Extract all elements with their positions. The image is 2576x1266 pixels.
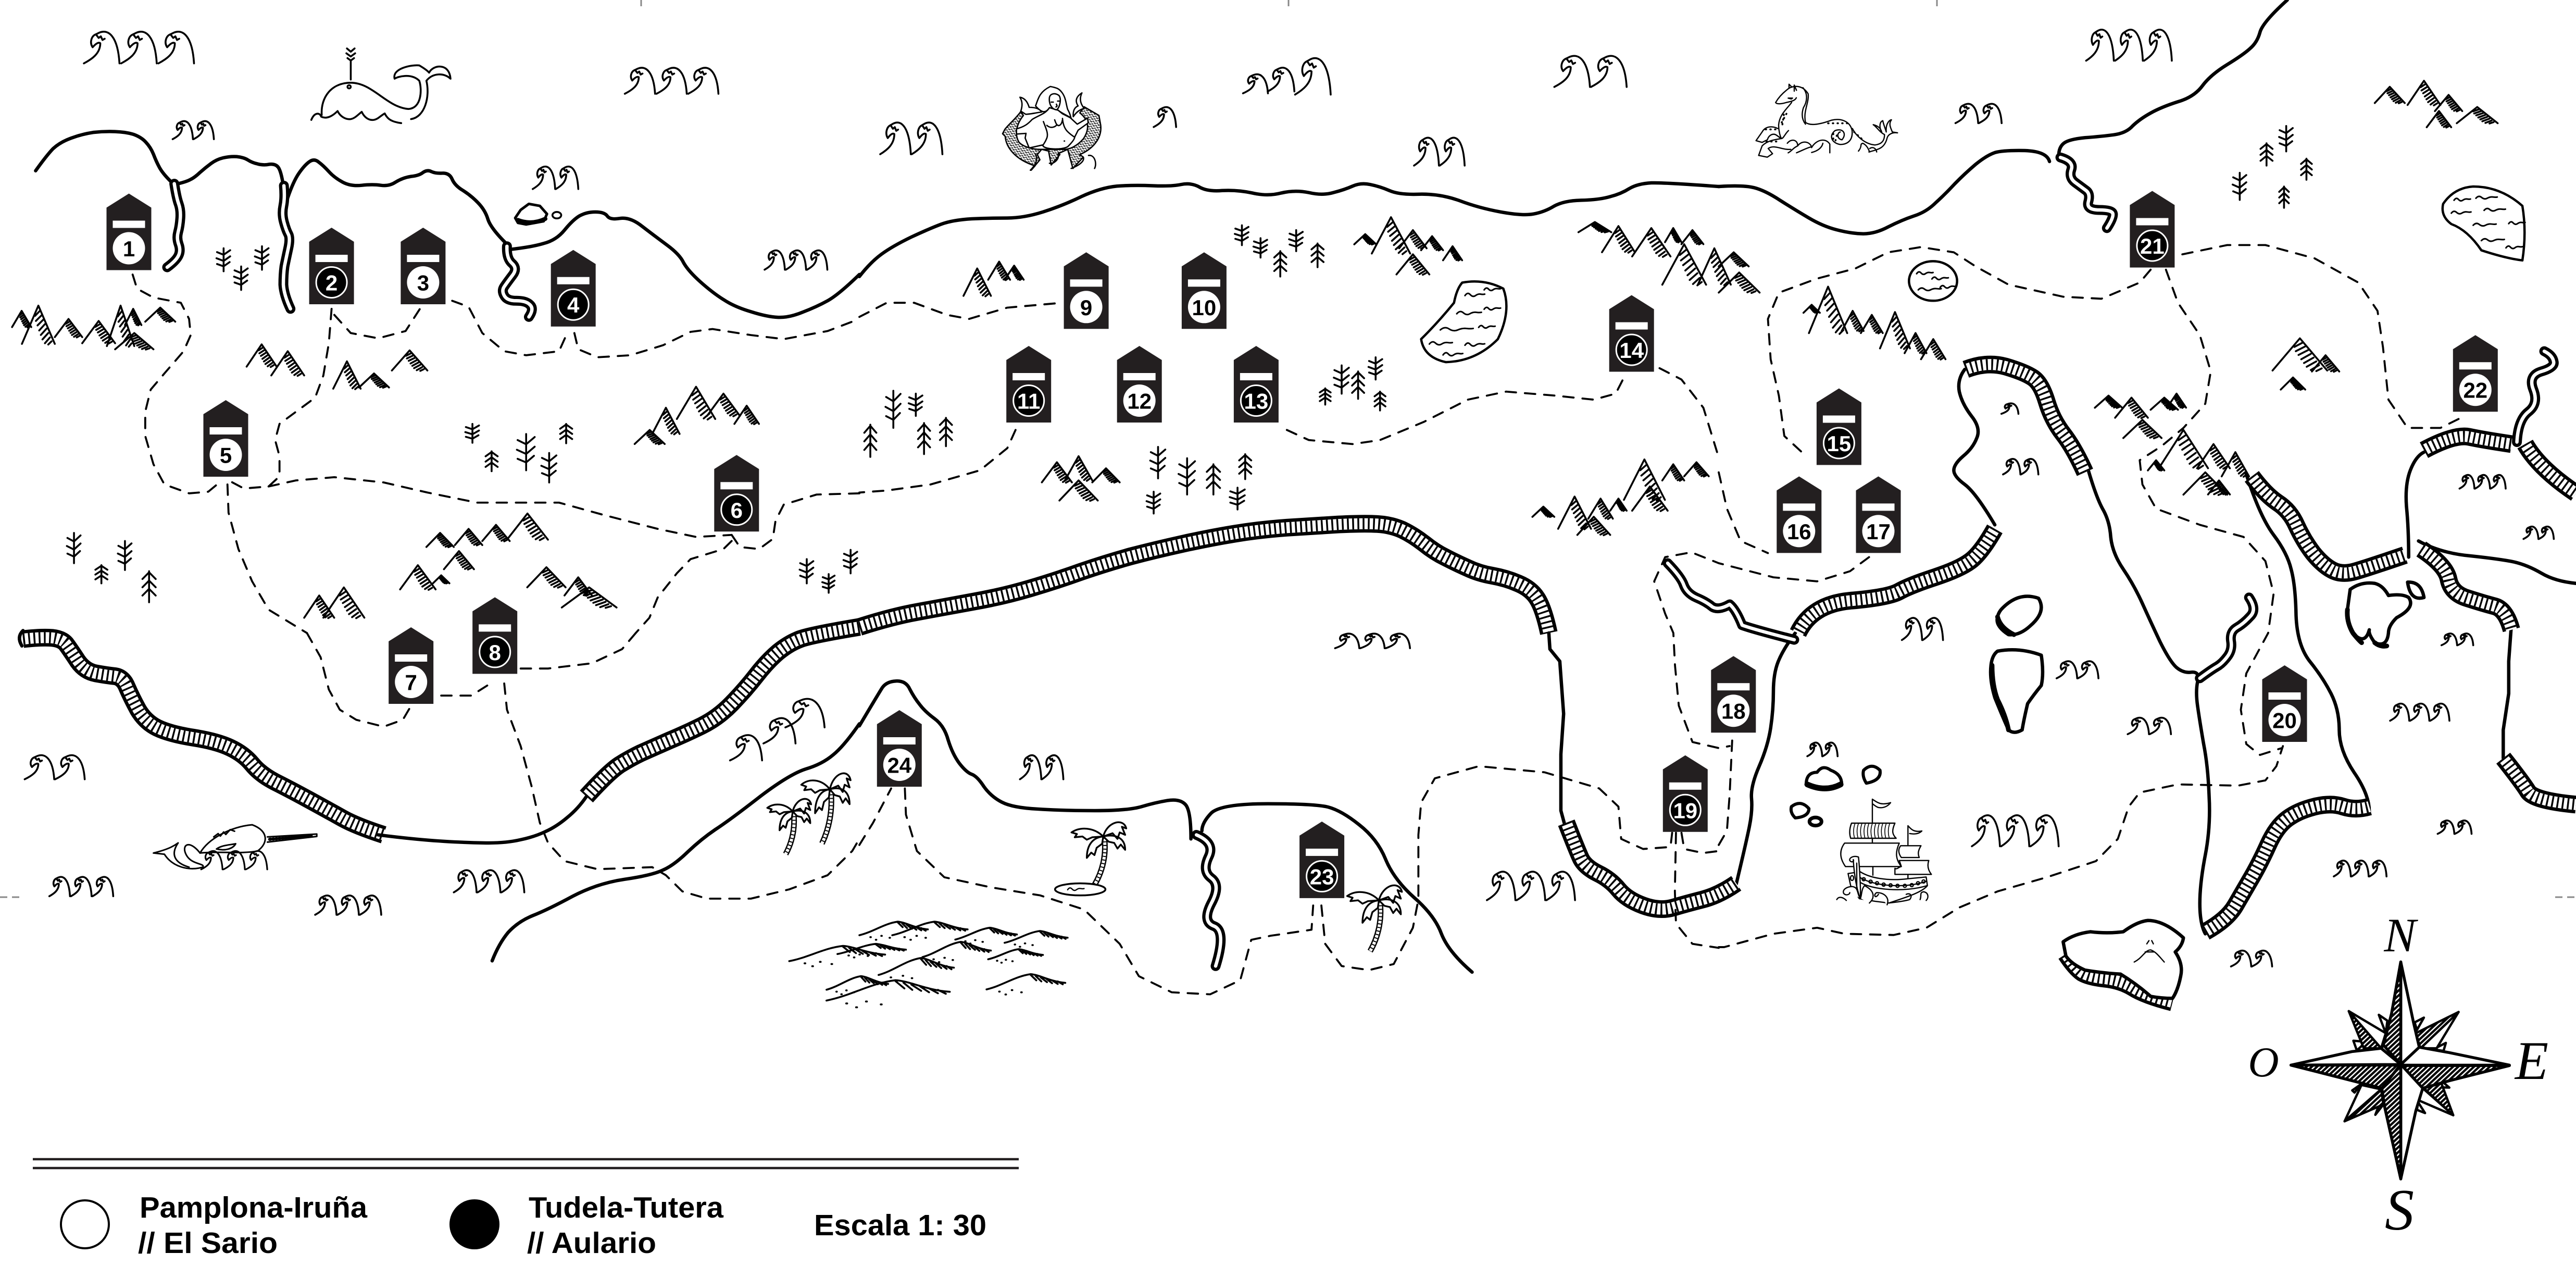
milestone marker 1: 1 <box>123 237 135 261</box>
milestone marker 23 <box>1299 822 1344 898</box>
trees north-west <box>67 246 857 602</box>
milestone marker 18: 18 <box>1721 699 1746 724</box>
coastline north-east <box>1719 0 2287 234</box>
milestone marker 24 <box>877 710 922 787</box>
hatched coasts east <box>1798 365 2576 932</box>
milestone marker 20 <box>2262 665 2307 742</box>
map tile north-west <box>12 32 859 633</box>
mermaid tail <box>1003 86 1101 170</box>
lake central <box>1421 281 1506 362</box>
milestone marker 15: 15 <box>1827 431 1851 456</box>
compass letter S: S <box>2385 1178 2414 1243</box>
waves south-west <box>24 699 824 915</box>
milestone marker 3 <box>401 228 445 304</box>
milestone marker 15 <box>1817 389 1861 465</box>
milestone marker 14: 14 <box>1619 338 1644 363</box>
secondary points <box>2345 1011 2459 1121</box>
waves north-east <box>1902 30 2554 640</box>
island with hatched edge <box>1991 650 2043 733</box>
mountains north-centre <box>964 217 1731 535</box>
milestone marker 5 <box>203 400 248 477</box>
milestone marker 8 <box>472 597 517 674</box>
map tile south-east <box>1791 634 2473 1002</box>
coastline north-centre <box>859 183 1719 277</box>
route lines north-west <box>133 275 859 633</box>
legend: El Sario label: // El Sario <box>138 1226 278 1260</box>
milestone marker 5: 5 <box>220 443 232 468</box>
rivers east <box>2060 157 2554 678</box>
milestone marker 14 <box>1609 295 1654 372</box>
crop marks <box>0 0 2576 897</box>
river south <box>1196 835 1221 966</box>
trees north-centre <box>864 225 1385 514</box>
palms south <box>1055 822 1402 951</box>
milestone marker 6: 6 <box>731 498 743 523</box>
waves north-west <box>84 32 828 270</box>
islands east <box>1997 582 2424 646</box>
trees north-east <box>2233 126 2312 208</box>
milestone marker 17 <box>1856 476 1901 553</box>
legend: scale: Escala 1: 30 <box>814 1209 986 1242</box>
waves south-centre <box>1020 634 1575 900</box>
map tile south-west <box>19 627 888 994</box>
main star <box>2291 962 2509 1179</box>
gulf and peninsula outlines <box>1736 369 2576 934</box>
milestone marker 7: 7 <box>405 670 417 695</box>
milestone marker 11: 11 <box>1017 389 1040 414</box>
milestone marker 18 <box>1711 656 1756 733</box>
compass letter O: O <box>2248 1038 2279 1086</box>
milestone marker 3: 3 <box>417 271 429 295</box>
icon: sea serpent <box>1756 84 1897 157</box>
milestone marker 2 <box>309 228 354 304</box>
milestone marker 4: 4 <box>567 293 580 317</box>
legend: Pamplona-Iruña label: Pamplona-Iruña <box>140 1191 368 1224</box>
milestone marker 16 <box>1777 476 1821 553</box>
milestone marker 19 <box>1663 755 1708 832</box>
icon: whale <box>311 48 451 123</box>
icon: small island north <box>515 204 561 225</box>
milestone marker 21: 21 <box>2140 234 2165 258</box>
hatched coast south-west <box>19 627 859 835</box>
mountains north-east <box>1719 81 2498 495</box>
lakes east <box>1909 187 2525 301</box>
milestone marker 1 <box>106 194 151 270</box>
hatched coast south <box>1566 823 1736 909</box>
milestone marker 23: 23 <box>1310 864 1334 889</box>
mountains north-west <box>12 306 759 618</box>
milestone marker 13: 13 <box>1244 389 1268 414</box>
mermaid waves <box>1030 154 1096 170</box>
milestone marker 20: 20 <box>2272 709 2297 733</box>
island with volcano <box>2063 921 2183 1002</box>
palms west <box>767 773 851 854</box>
waves south-east <box>1807 634 2473 966</box>
route lines south-centre <box>859 766 1719 995</box>
legend <box>33 1159 1019 1260</box>
milestone marker 24: 24 <box>887 753 912 777</box>
icon: mermaid <box>1003 86 1101 170</box>
map tile north-east <box>1654 0 2576 947</box>
milestone marker 12: 12 <box>1127 389 1152 414</box>
milestone marker 13 <box>1234 346 1279 423</box>
milestone marker 22: 22 <box>2463 378 2487 403</box>
river entering the gulf <box>1668 563 1794 640</box>
legend: Tudela-Tutera symbol <box>449 1199 499 1249</box>
map tile south-centre <box>827 633 1736 1007</box>
coastline north-west <box>35 131 859 317</box>
icon: narwhal <box>154 825 317 870</box>
milestone marker 17: 17 <box>1866 519 1891 544</box>
milestone marker 8: 8 <box>489 640 501 665</box>
sand dunes <box>827 922 1068 1007</box>
waves north-centre <box>880 56 1627 166</box>
route lines east <box>1654 245 2465 947</box>
milestone marker 4 <box>551 250 596 327</box>
route lines north-centre <box>859 303 1717 492</box>
compass letter N: N <box>2383 909 2418 962</box>
milestone marker 21 <box>2130 191 2174 268</box>
milestone marker 11 <box>1006 346 1051 423</box>
legend: Pamplona-Iruña symbol <box>61 1200 109 1248</box>
map tile north-centre <box>859 56 1731 633</box>
milestone marker 6 <box>714 455 759 531</box>
icon: ship <box>1837 799 1931 905</box>
rivers north-west <box>167 184 532 317</box>
milestone marker 2: 2 <box>326 271 337 295</box>
milestone marker 19: 19 <box>1673 798 1697 823</box>
legend: Aulario label: // Aulario <box>527 1226 656 1260</box>
route lines south-west <box>307 633 859 899</box>
dunes west part <box>789 946 888 994</box>
coastline south-west <box>378 724 859 961</box>
coastline south-centre <box>859 633 1565 972</box>
milestone marker 10: 10 <box>1192 295 1216 320</box>
mermaid figure <box>1017 86 1088 149</box>
legend: Tudela-Tutera label: Tudela-Tutera <box>529 1191 724 1224</box>
milestone marker 7 <box>389 627 433 704</box>
milestone marker 16: 16 <box>1787 519 1811 544</box>
compass letter E: E <box>2514 1030 2548 1091</box>
small islets <box>1791 766 1880 826</box>
milestone marker 9 <box>1064 252 1109 329</box>
milestone marker 10 <box>1182 252 1227 329</box>
compass rose <box>2291 962 2509 1179</box>
milestone marker 22 <box>2453 335 2498 412</box>
milestone marker 12 <box>1117 346 1162 423</box>
hatched coast central <box>859 524 1549 633</box>
milestone marker 9: 9 <box>1080 295 1092 320</box>
